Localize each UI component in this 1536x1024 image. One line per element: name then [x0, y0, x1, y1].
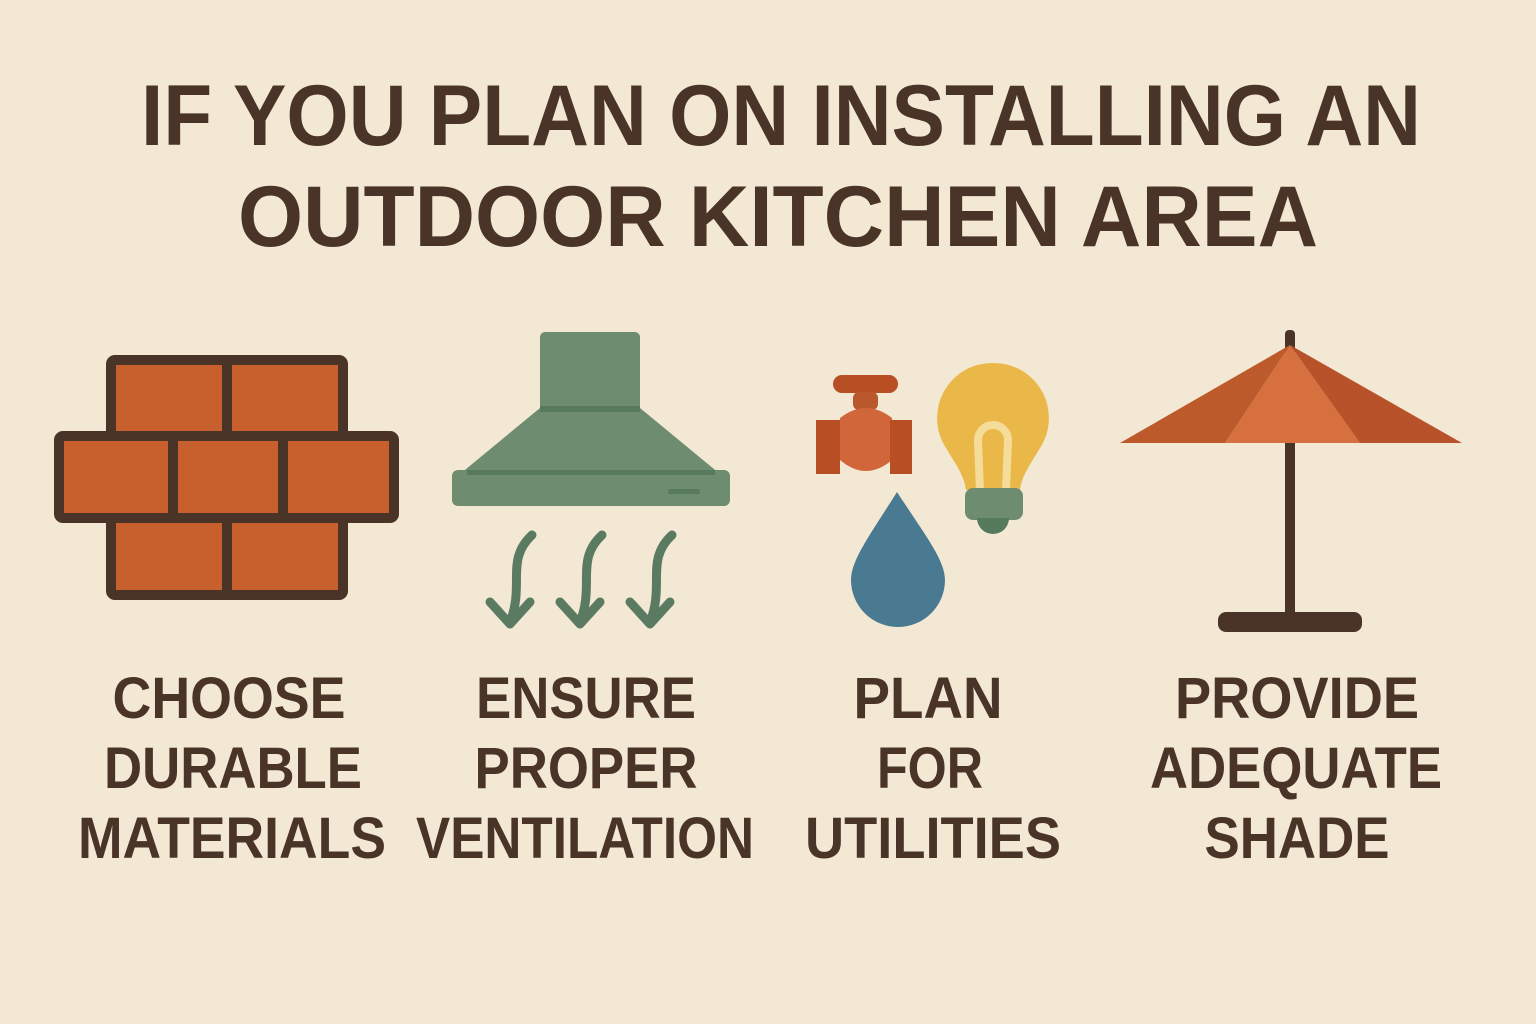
label: ensure proper ventilation: PROPER [474, 736, 698, 801]
label: choose durable materials: CHOOSE [112, 666, 346, 731]
label: plan for utilities [805, 666, 1061, 871]
label: ensure proper ventilation [416, 666, 754, 871]
title [141, 68, 1421, 265]
icon: range hood [452, 332, 730, 624]
icon: utilities [816, 363, 1049, 627]
label: plan for utilities: UTILITIES [805, 806, 1061, 871]
label: choose durable materials: MATERIALS [78, 806, 386, 871]
label: choose durable materials [78, 666, 386, 871]
label: provide adequate shade [1150, 666, 1442, 871]
label: provide adequate shade: SHADE [1204, 806, 1390, 871]
title: IF YOU PLAN ON INSTALLING AN [141, 68, 1421, 164]
icon: umbrella [1120, 330, 1462, 632]
arrows: airflow [490, 535, 672, 624]
label: choose durable materials: DURABLE [104, 736, 362, 801]
label: ensure proper ventilation: VENTILATION [416, 806, 754, 871]
title: OUTDOOR KITCHEN AREA [238, 169, 1318, 265]
label: plan for utilities: PLAN [854, 666, 1002, 731]
label: plan for utilities: FOR [877, 736, 983, 801]
label: provide adequate shade: PROVIDE [1175, 666, 1419, 731]
label: ensure proper ventilation: ENSURE [476, 666, 696, 731]
label: provide adequate shade: ADEQUATE [1150, 736, 1442, 801]
icon: brick wall [59, 360, 394, 595]
